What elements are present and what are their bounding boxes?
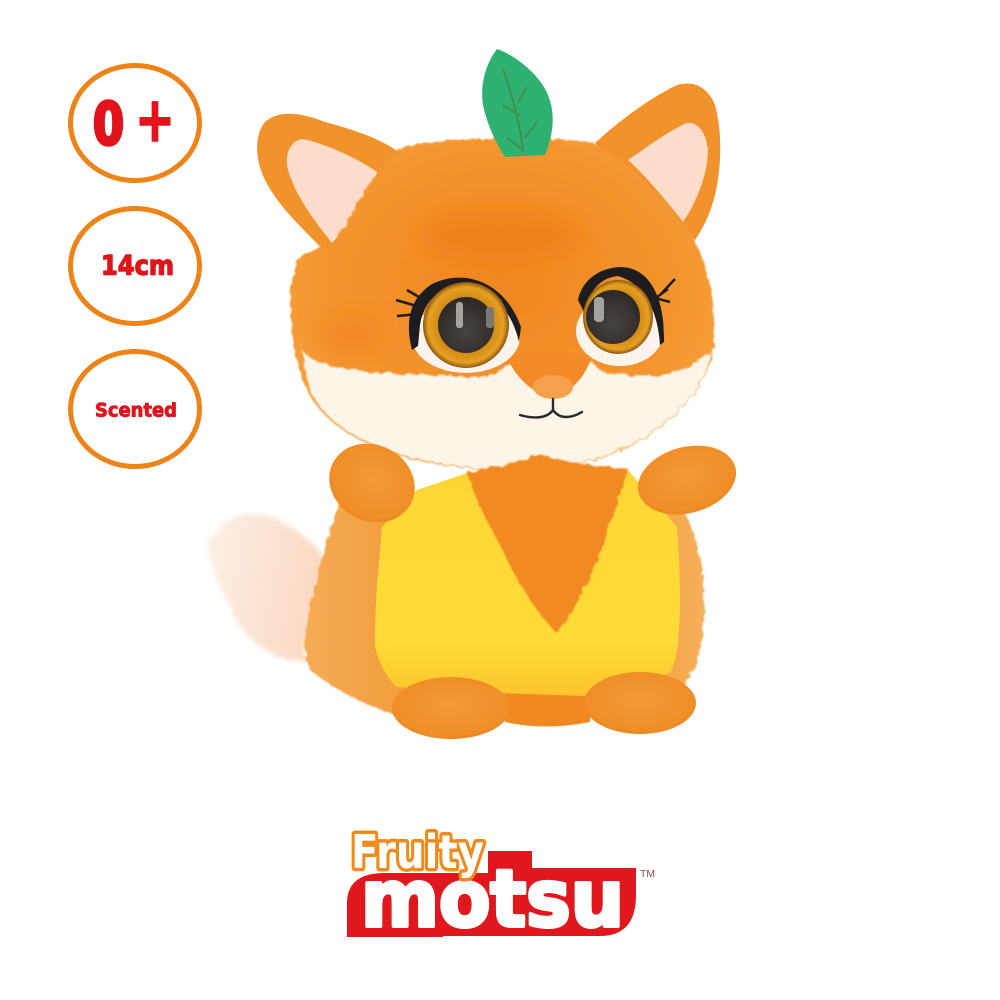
left arm — [315, 429, 429, 537]
nose — [533, 375, 573, 399]
plush fox illustration — [207, 49, 744, 739]
right ear — [595, 84, 720, 240]
logo red background — [347, 851, 636, 937]
body — [305, 490, 704, 715]
yellow belly — [375, 470, 680, 696]
left eye — [396, 278, 521, 373]
right foot — [584, 672, 696, 734]
trademark: TM — [640, 869, 655, 880]
bottom seam between feet — [505, 690, 590, 726]
badge: scented — [70, 352, 200, 466]
brand logo — [347, 825, 655, 945]
badge: age 0+ — [70, 66, 200, 180]
forehead shading — [415, 209, 585, 261]
right eye — [576, 267, 675, 366]
logo word motsu: motsu — [361, 855, 624, 945]
left ear — [257, 114, 402, 262]
left foot — [392, 677, 510, 739]
badge: size 14cm: 14cm — [101, 250, 174, 282]
right arm — [630, 435, 744, 525]
leaf — [482, 49, 553, 157]
tail — [207, 514, 325, 660]
orange bib triangle — [467, 454, 628, 633]
mouth — [520, 399, 582, 417]
badge: age 0+: + — [135, 83, 175, 156]
logo word fruity: Fruity — [351, 825, 484, 879]
badge: age 0+: 0 — [93, 90, 124, 158]
badge: size 14cm — [70, 208, 200, 324]
nose bridge — [508, 352, 590, 399]
white muzzle — [303, 352, 710, 470]
badge: scented: Scented — [95, 400, 177, 422]
cheek shading — [320, 315, 380, 355]
head — [290, 138, 714, 471]
